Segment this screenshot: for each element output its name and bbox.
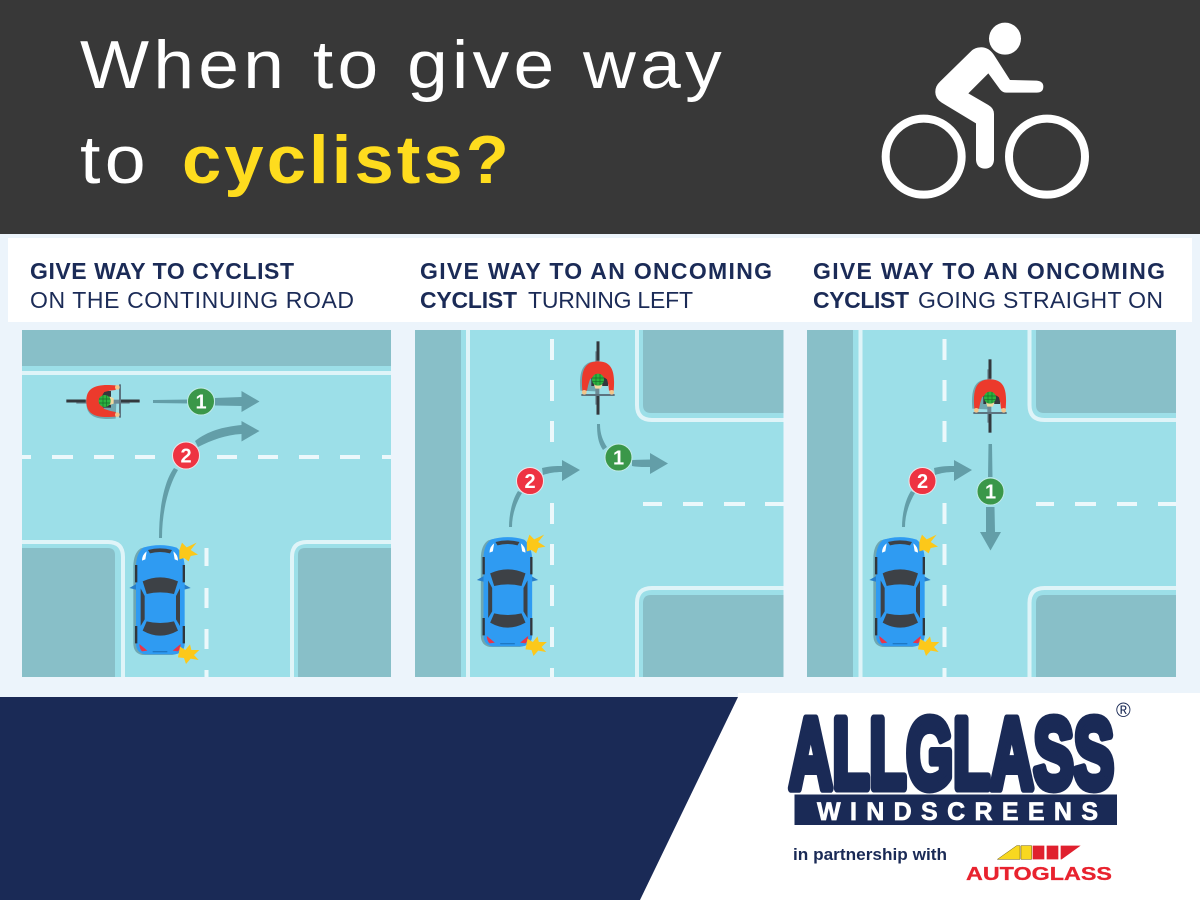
logo: Allglass Windscreens: WINDSCREENS	[817, 798, 1098, 826]
partnership text: in partnership with	[793, 846, 947, 864]
heading: panel 1: GIVE WAY TO CYCLIST	[30, 258, 294, 284]
title: to	[80, 122, 150, 198]
heading: panel 2: CYCLIST	[420, 287, 517, 313]
heading band	[8, 238, 1192, 322]
marker 1: 1	[985, 482, 996, 504]
heading: panel 2: GIVE WAY TO AN ONCOMING	[420, 258, 772, 284]
icon: cyclist	[886, 23, 1085, 195]
heading: panel 3: CYCLIST	[813, 287, 909, 313]
logo: Autoglass	[966, 846, 1112, 884]
cyclist	[972, 359, 1007, 433]
panel: oncoming cyclist turning left	[415, 330, 784, 677]
arrow 2	[902, 460, 972, 527]
car	[869, 535, 939, 656]
title	[80, 27, 726, 198]
marker 2	[516, 468, 544, 494]
heading: panel 3	[813, 258, 1165, 313]
title: When to give way	[80, 27, 726, 103]
title: cyclists?	[182, 122, 512, 198]
cyclist	[66, 384, 140, 419]
marker 2: 2	[180, 446, 192, 468]
arrow 1	[980, 444, 1001, 550]
car	[129, 543, 199, 664]
header band	[0, 0, 1200, 234]
car	[477, 535, 547, 656]
footer white area	[600, 693, 1200, 900]
marker 2	[909, 468, 936, 494]
marker 1: 1	[613, 448, 624, 470]
panel: oncoming cyclist going straight on	[807, 330, 1176, 677]
marker 2	[172, 442, 200, 469]
marker 1	[605, 444, 632, 471]
marker 2: 2	[524, 471, 536, 493]
marker 1: 1	[195, 392, 207, 414]
arrow 1	[597, 424, 668, 474]
footer navy band	[0, 697, 738, 900]
panel: continuing road junction	[22, 330, 391, 677]
heading: panel 3: GIVE WAY TO AN ONCOMING	[813, 258, 1165, 284]
logo: Autoglass: AUTOGLASS	[966, 863, 1112, 884]
marker 1	[188, 388, 214, 415]
heading: panel 1: ON THE CONTINUING ROAD	[30, 287, 354, 313]
heading: panel 2: TURNING LEFT	[528, 287, 693, 313]
arrow 2	[159, 421, 260, 538]
marker 2: 2	[917, 471, 928, 493]
arrow 2	[509, 460, 580, 527]
logo: Allglass Windscreens: ®	[1116, 700, 1131, 722]
heading: panel 2	[420, 258, 772, 313]
cyclist	[580, 341, 615, 415]
arrow 1	[153, 391, 260, 412]
marker 1	[977, 478, 1004, 505]
heading: panel 1	[30, 258, 354, 313]
heading: panel 3: GOING STRAIGHT ON	[918, 287, 1163, 313]
